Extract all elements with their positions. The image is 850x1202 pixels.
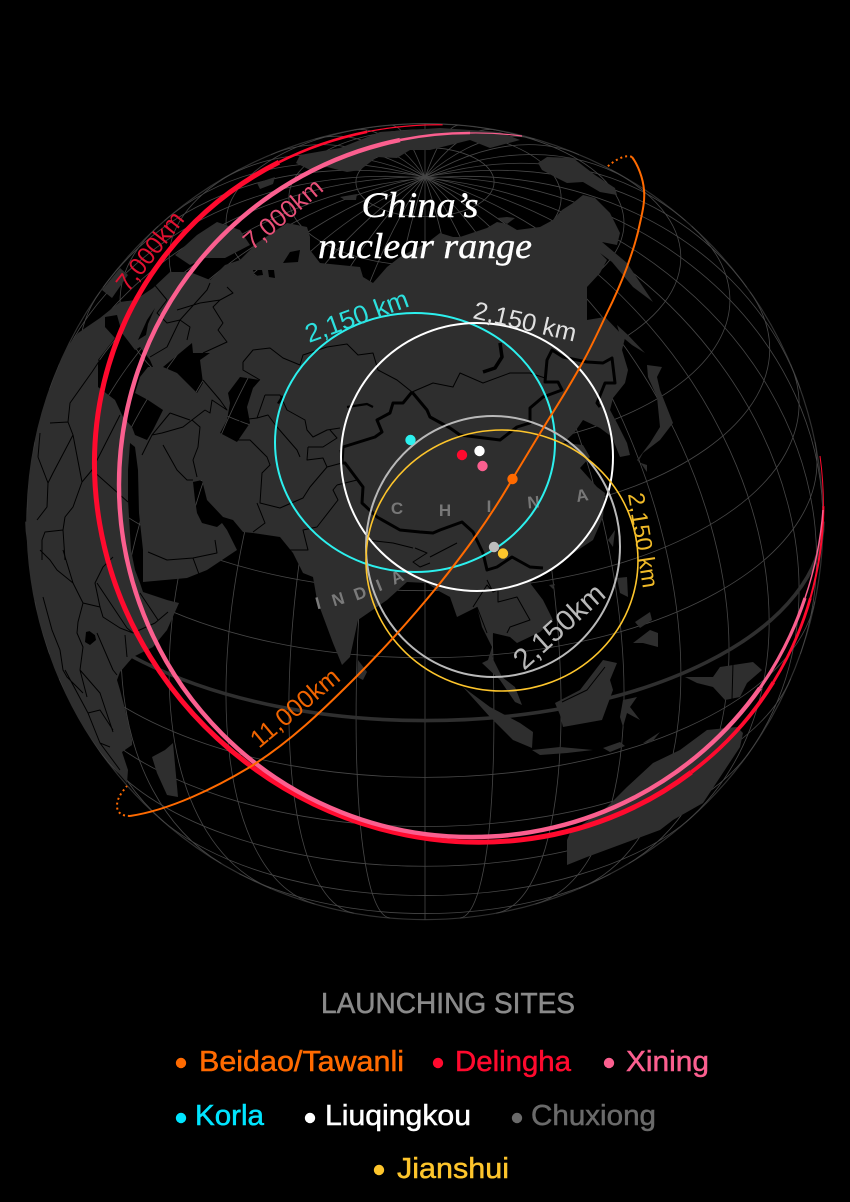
range ring: Korla 2,150 km bbox=[275, 313, 555, 572]
map label: INDIA: I bbox=[373, 576, 385, 595]
map label: CHINA bbox=[391, 485, 590, 520]
legend item: Liuqingkou: Liuqingkou bbox=[325, 1100, 471, 1132]
map label: INDIA: N bbox=[329, 589, 347, 610]
map label: CHINA: C bbox=[391, 499, 403, 518]
map label: INDIA: D bbox=[351, 582, 369, 604]
title bbox=[318, 185, 532, 266]
legend heading: LAUNCHING SITES bbox=[321, 988, 575, 1020]
legend item: Korla: Korla bbox=[195, 1100, 264, 1132]
map label: CHINA: I bbox=[487, 497, 491, 516]
map label: INDIA bbox=[313, 566, 407, 613]
legend item: Jianshui: Jianshui bbox=[397, 1153, 509, 1185]
launch site markers bbox=[405, 435, 518, 559]
map label: INDIA: I bbox=[313, 594, 323, 613]
range ring: Chuxiong 2,150 km bbox=[366, 416, 620, 677]
range label: Chuxiong 2,150km: 2,150km bbox=[507, 577, 612, 676]
legend item: Xining: Xining bbox=[626, 1046, 709, 1078]
range ring: Xining 7,000 km bbox=[119, 133, 823, 837]
map label: CHINA: N bbox=[527, 493, 540, 513]
legend: launching sites bbox=[176, 988, 709, 1185]
islands bbox=[102, 128, 762, 865]
legend item: Delingha: Delingha bbox=[455, 1046, 571, 1078]
range label: Jianshui 2,150 km: 2,150 km bbox=[623, 491, 664, 590]
range ring: Jianshui 2,150 km bbox=[366, 430, 638, 691]
range path: Beidao/Tawanli 11,000 km bbox=[117, 156, 644, 816]
China border and large lakes bbox=[342, 343, 615, 570]
range label: Xining 7,000km: 7,000km bbox=[238, 173, 329, 256]
map label: INDIA: A bbox=[388, 566, 407, 589]
range label: Beidao/Tawanli 11,000km: 11,000km bbox=[245, 663, 346, 754]
legend item: Chuxiong: Chuxiong bbox=[531, 1100, 656, 1132]
legend item: Beidao/Tawanli: Beidao/Tawanli bbox=[199, 1046, 404, 1078]
title: nuclear range bbox=[318, 226, 532, 266]
range label: Korla 2,150 km: 2,150 km bbox=[301, 284, 413, 349]
range label: Delingha 7,000km: 7,000km bbox=[111, 206, 190, 297]
range label: Liuqingkou 2,150 km: 2,150 km bbox=[471, 297, 579, 347]
range ring: Delingha 7,000 km bbox=[94, 125, 823, 842]
country borders bbox=[37, 283, 733, 770]
land masses bbox=[15, 128, 762, 865]
map label: CHINA: H bbox=[439, 501, 451, 520]
range ring: Liuqingkou 2,150 km bbox=[341, 323, 613, 591]
title: China’s bbox=[362, 185, 478, 225]
map label: CHINA: A bbox=[574, 485, 590, 506]
graticule: meridians and parallels bbox=[27, 124, 823, 920]
